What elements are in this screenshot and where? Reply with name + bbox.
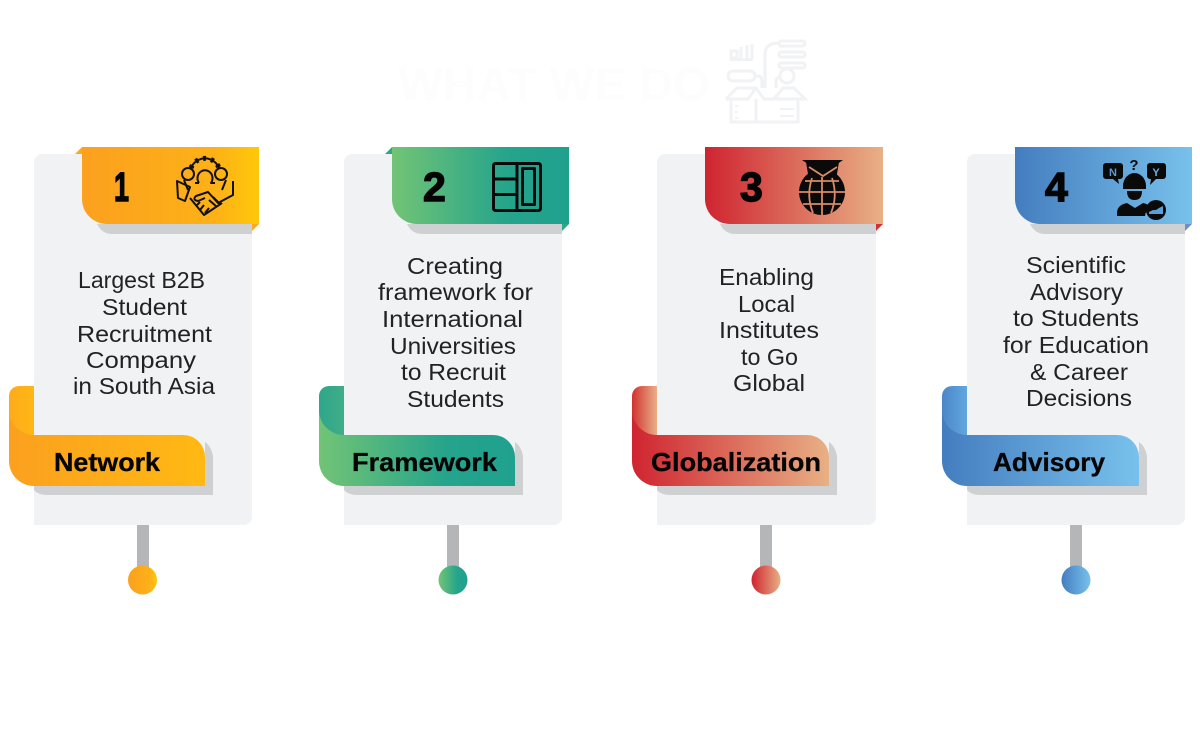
panel: Network (9, 147, 259, 594)
icon: layout grid (494, 164, 540, 210)
description: Institutes (719, 317, 819, 343)
description: Student (102, 294, 188, 320)
ribbon shadow (657, 442, 837, 495)
ribbon shadow (344, 442, 523, 495)
description (378, 253, 533, 412)
ribbon (942, 410, 1139, 486)
description (719, 264, 819, 396)
stem (137, 525, 149, 571)
description: Advisory (1030, 279, 1124, 305)
description (73, 267, 215, 399)
tab shadow (97, 224, 252, 234)
label: Globalization (651, 447, 821, 477)
ribbon fold (9, 386, 34, 440)
number: 1 (114, 164, 129, 210)
icon: advisor with yes/no bubbles (1103, 157, 1166, 220)
ribbon fold (632, 386, 657, 440)
icon: advisor with yes/no bubbles: Y (1152, 167, 1160, 179)
description: International (382, 306, 523, 332)
card background (344, 154, 562, 525)
description: & Career (1030, 359, 1128, 385)
icon: handshake and team gear (177, 158, 233, 215)
label: Framework (352, 447, 498, 477)
label: Network (54, 447, 161, 477)
description: Universities (390, 333, 516, 359)
description: Students (407, 386, 504, 412)
description: Company (86, 347, 197, 373)
description: Scientific (1026, 252, 1126, 278)
description: Decisions (1026, 385, 1132, 411)
description: Global (733, 370, 805, 396)
stem (760, 525, 772, 571)
label: Advisory (993, 447, 1106, 477)
ribbon fold (942, 386, 967, 440)
title: What We Do (near-white) (398, 41, 805, 122)
description: framework for (378, 279, 533, 305)
header tab (1185, 224, 1192, 231)
number: 2 (423, 164, 446, 210)
icon: advisor with yes/no bubbles: N (1109, 167, 1117, 179)
card background (967, 154, 1185, 525)
header tab (385, 147, 569, 231)
icon: advisor with yes/no bubbles: ? (1129, 157, 1139, 174)
tab shadow (407, 224, 562, 234)
card background (34, 154, 252, 525)
header tab (75, 147, 259, 231)
title: What We Do (near-white): WHAT WE DO (398, 58, 710, 110)
description: Recruitment (77, 321, 213, 347)
marker dot (752, 566, 780, 594)
marker dot (1062, 566, 1090, 594)
panel: Advisory (942, 147, 1192, 594)
ribbon (319, 410, 515, 486)
header tab (876, 224, 883, 231)
stem (447, 525, 459, 571)
marker dot (438, 566, 468, 594)
description: Local (738, 291, 795, 317)
stem (1070, 525, 1082, 571)
icon: open box (726, 41, 805, 122)
ribbon (632, 410, 829, 486)
ribbon (9, 410, 205, 486)
description: Creating (407, 253, 503, 279)
number: 4 (1045, 164, 1068, 210)
description: Largest B2B (78, 267, 205, 293)
icon: globe with graduation cap (799, 160, 845, 215)
panel: Framework (319, 147, 569, 594)
tab shadow (1030, 224, 1185, 234)
number: 3 (740, 164, 763, 210)
card background (657, 154, 876, 525)
description: in South Asia (73, 373, 215, 399)
panel: Globalization (632, 147, 883, 594)
ribbon shadow (967, 442, 1147, 495)
description (1003, 252, 1149, 411)
ribbon shadow (34, 442, 213, 495)
marker dot (128, 566, 157, 594)
description: for Education (1003, 332, 1149, 358)
description: Enabling (719, 264, 814, 290)
ribbon fold (319, 386, 344, 440)
description: to Recruit (401, 359, 507, 385)
description: to Go (741, 344, 798, 370)
description: to Students (1013, 305, 1139, 331)
tab shadow (720, 224, 876, 234)
